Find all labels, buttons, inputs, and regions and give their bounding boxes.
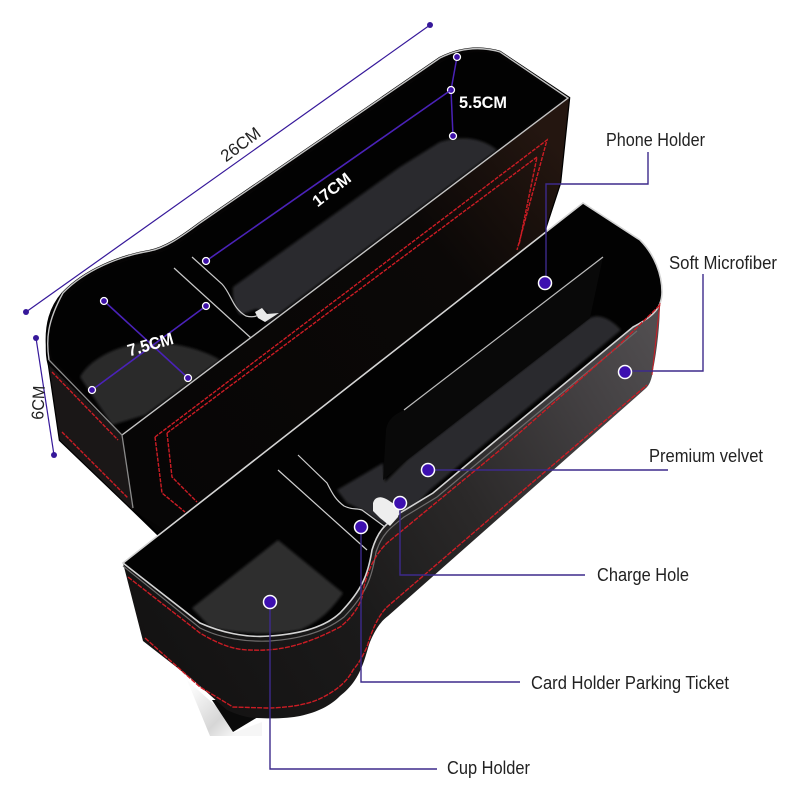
rear organizer: cup velvet floor bbox=[80, 343, 220, 425]
front organizer: long velvet floor bbox=[337, 316, 621, 525]
rear organizer: long velvet floor bbox=[233, 138, 497, 322]
callout: Soft Microfiber bbox=[618, 253, 777, 378]
callout: Card Holder Parking Ticket bbox=[354, 520, 729, 693]
callout: Soft Microfiber: Soft Microfiber bbox=[669, 253, 777, 273]
front organizer: interior tray bbox=[123, 203, 662, 636]
dimension: 7.5CM bbox=[88, 298, 210, 394]
callout: Charge Hole: Charge Hole bbox=[597, 565, 689, 585]
front organizer: outer side face bbox=[123, 300, 660, 718]
shadow under front organizer bbox=[187, 680, 262, 736]
dimension: 6CM: 6CM bbox=[28, 385, 49, 420]
front organizer bbox=[123, 203, 662, 718]
callout: Premium velvet: Premium velvet bbox=[649, 446, 763, 466]
front organizer: partition edge bbox=[404, 257, 603, 410]
front organizer: cup velvet floor bbox=[192, 540, 343, 634]
dimension: 7.5CM: 7.5CM bbox=[125, 329, 176, 360]
rear organizer: interior tray bbox=[50, 52, 564, 431]
rear organizer: card slot dividers bbox=[174, 257, 262, 338]
front organizer: charge plug bbox=[373, 497, 400, 526]
front organizer: card slot dividers bbox=[278, 455, 385, 550]
rear organizer: left face bbox=[49, 365, 133, 510]
callout: Premium velvet bbox=[422, 446, 763, 476]
rear organizer: charge plug bbox=[255, 308, 279, 322]
callout: Phone Holder bbox=[538, 130, 705, 290]
dimension: 5.5CM: 5.5CM bbox=[459, 93, 507, 112]
rear organizer: red stitching bbox=[52, 140, 547, 512]
front organizer: lower rim line bbox=[123, 331, 637, 641]
front organizer: red stitching bbox=[128, 303, 660, 708]
callout: Cup Holder: Cup Holder bbox=[447, 758, 530, 778]
rear organizer: rim highlight bbox=[48, 49, 568, 435]
dimension: 17CM bbox=[202, 90, 451, 264]
front organizer rear tail bbox=[212, 700, 258, 732]
dimension: 26CM bbox=[23, 22, 433, 315]
rear organizer bbox=[47, 49, 569, 575]
callout: Cup Holder bbox=[264, 596, 530, 778]
front organizer: phone partition bbox=[383, 257, 603, 480]
dimension: 5.5CM bbox=[448, 54, 507, 140]
rear organizer: outer body bbox=[47, 49, 569, 575]
rear organizer: long face bbox=[122, 98, 569, 560]
rear organizer: front edge of rim bbox=[49, 360, 133, 508]
dimension: 26CM: 26CM bbox=[217, 123, 264, 166]
callout: Charge Hole bbox=[394, 496, 689, 585]
dimension: 17CM: 17CM bbox=[310, 170, 355, 211]
front organizer: rim highlight bbox=[123, 203, 662, 636]
callout: Phone Holder: Phone Holder bbox=[606, 130, 705, 150]
callout: Card Holder Parking Ticket: Card Holder Parking Ticket bbox=[531, 673, 729, 693]
dimension: 6CM bbox=[28, 335, 57, 458]
